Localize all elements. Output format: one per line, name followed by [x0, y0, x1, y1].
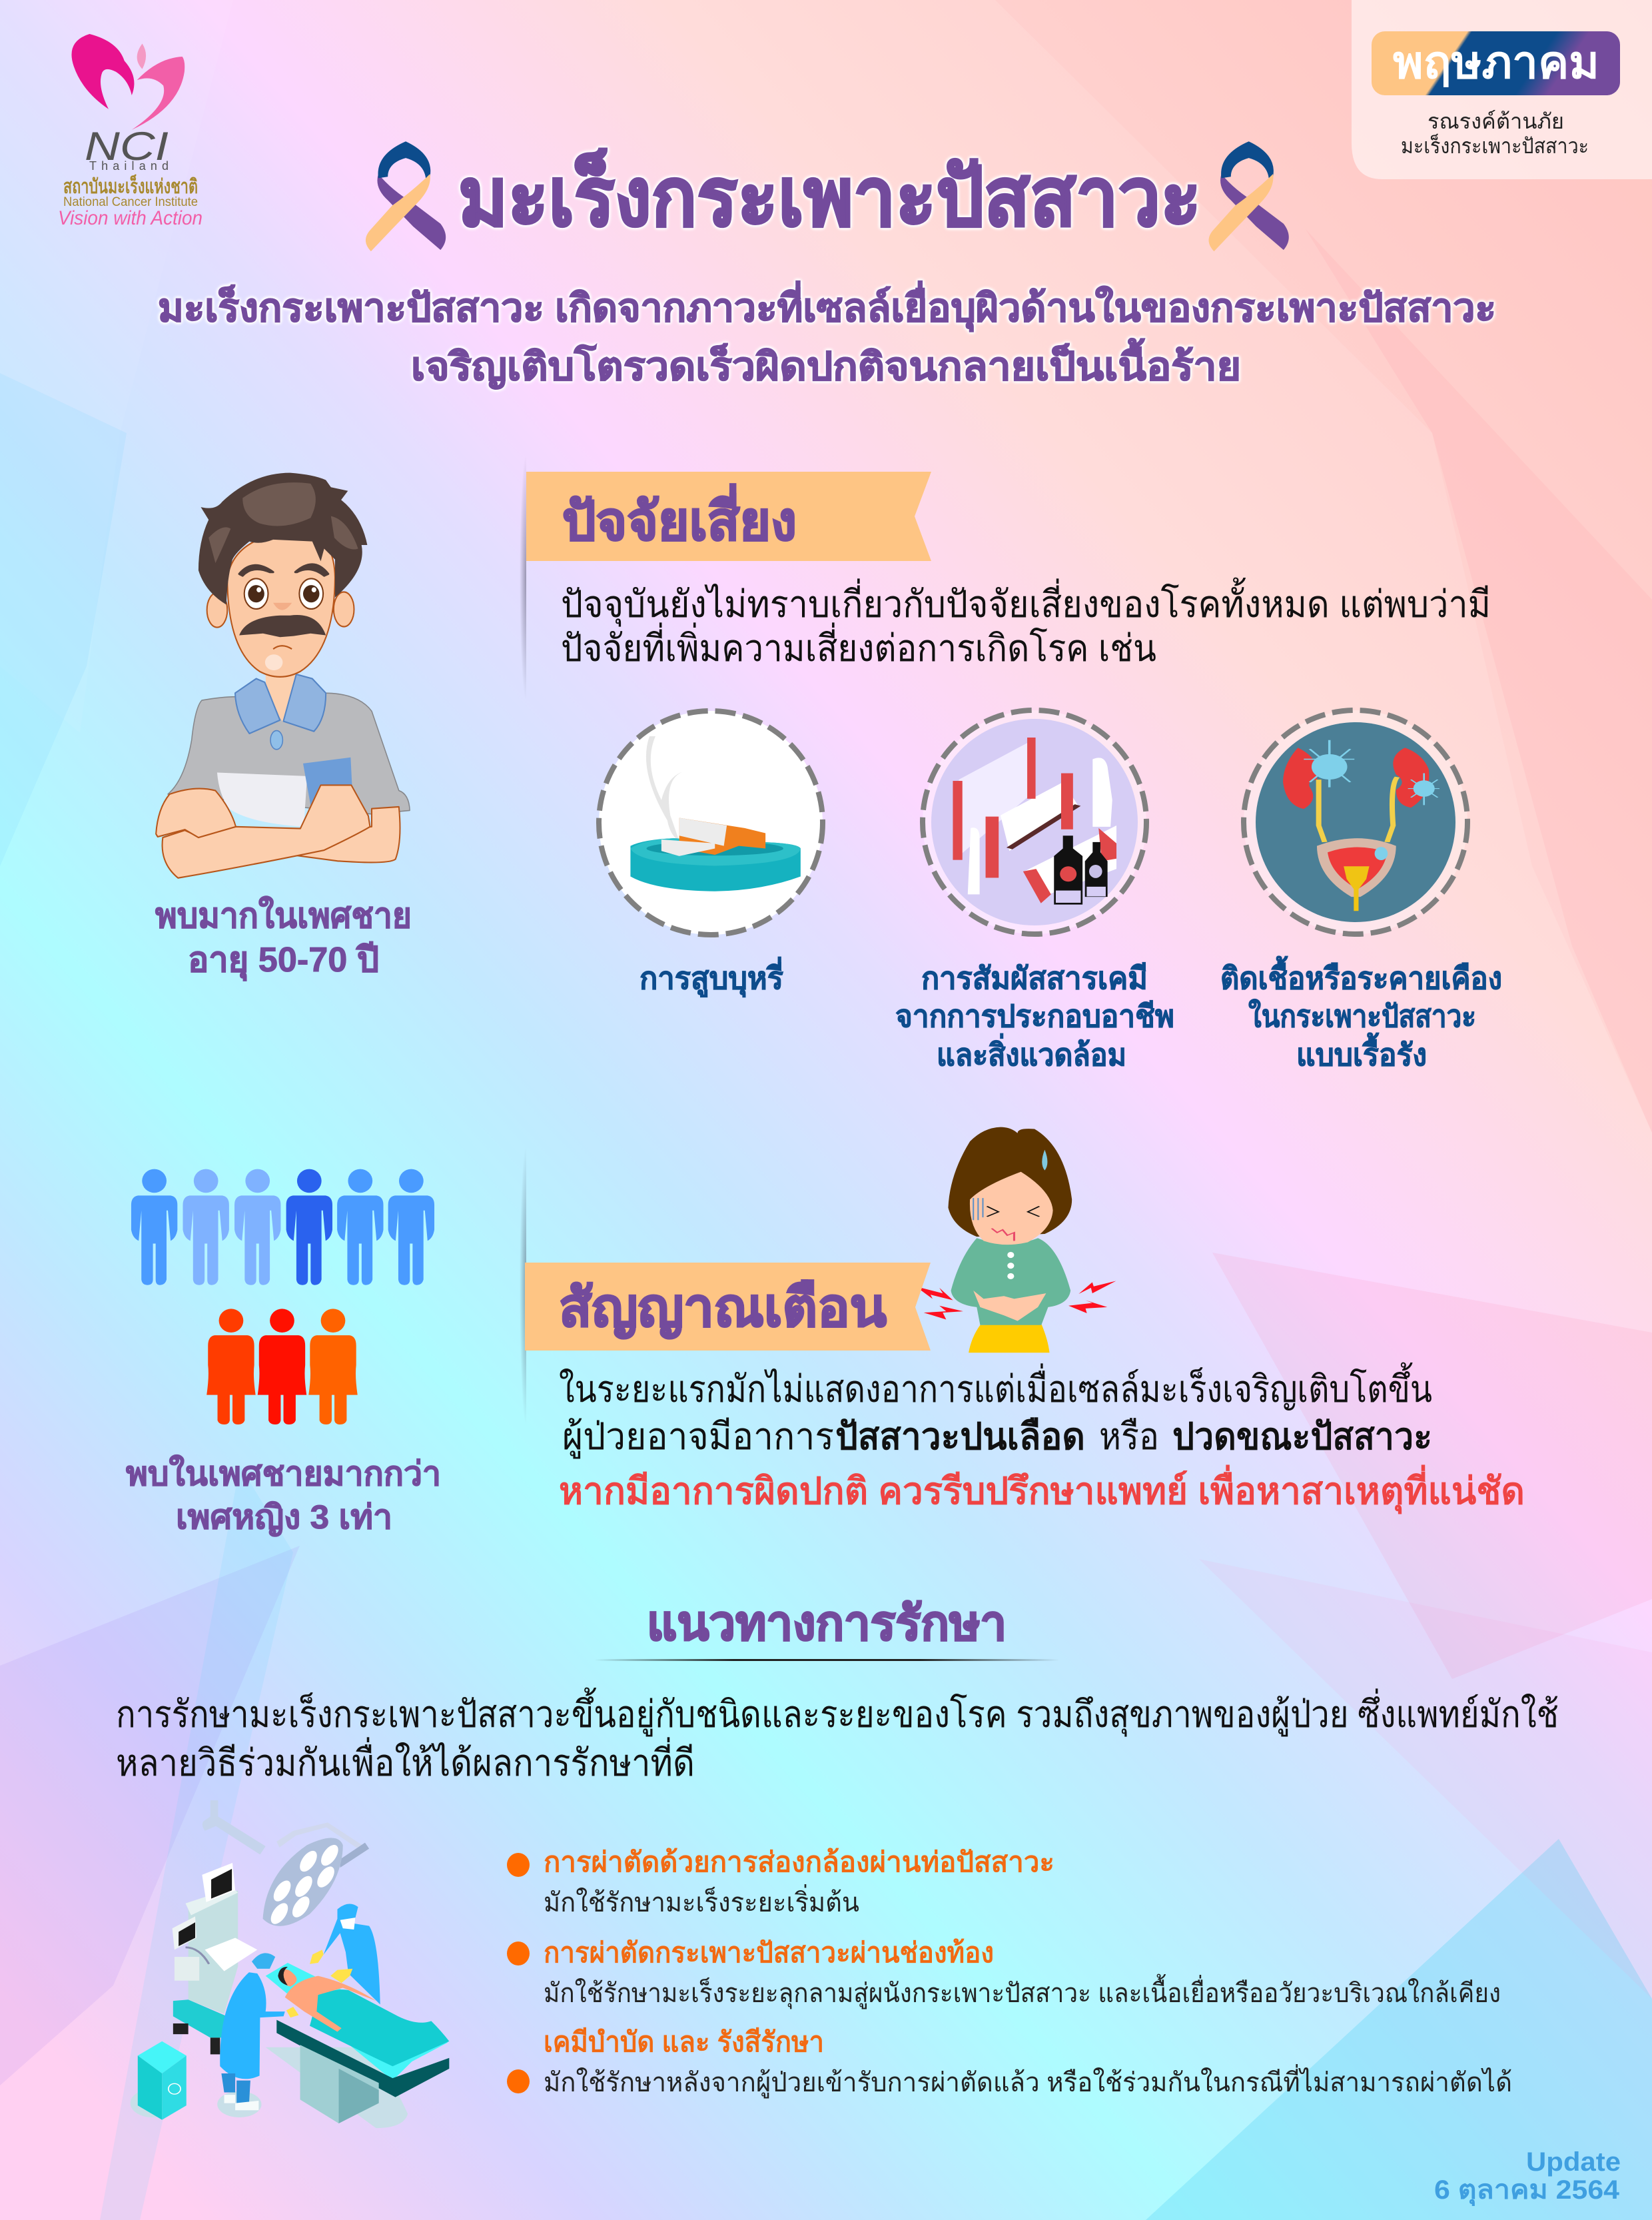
list: treatment options — [507, 1846, 1512, 2098]
text block: warning symptoms: หรือ — [1099, 1415, 1159, 1457]
heading: risk factors: ปัจจัยเสี่ยง — [562, 484, 797, 551]
label: infection — [1220, 955, 1502, 1072]
pictogram: three women — [206, 1309, 358, 1424]
risk section edge shadow — [513, 454, 526, 701]
illustration: operating room — [131, 1800, 449, 2128]
icon: left awareness ribbon — [366, 141, 446, 251]
update date — [1434, 2147, 1621, 2207]
treatment item: cystoscopic surgery: การผ่าตัดด้วยการส่องกล้องผ่านท่อปัสสาวะ — [544, 1846, 1054, 1878]
logo: National Cancer Institute: NCI — [85, 124, 169, 169]
intro text — [158, 280, 1496, 389]
treatment item: chemo and radiotherapy — [507, 2026, 1512, 2098]
label: infection: ในกระเพาะปัสสาวะ — [1248, 998, 1476, 1033]
caption: age range: พบมากในเพศชาย — [155, 895, 412, 935]
month label: พฤษภาคม — [1393, 37, 1599, 88]
caption: age range: อายุ 50-70 ปี — [188, 941, 379, 981]
label: infection: ติดเชื้อหรือระคายเคือง — [1220, 955, 1502, 995]
label: smoking: การสูบบุหรี่ — [639, 957, 783, 997]
treatment item: abdominal bladder surgery: การผ่าตัดกระเพาะปัสสาวะผ่านช่องท้อง — [544, 1937, 994, 1968]
heading: warning signs — [525, 1263, 931, 1351]
text block: risk intro: ปัจจัยที่เพิ่มความเสี่ยงต่อการเกิดโรค เช่น — [561, 622, 1156, 669]
treatment item: chemo and radiotherapy: มักใช้รักษาหลังจากผู้ป่วยเข้ารับการผ่าตัดแล้ว หรือใช้ร่วมกันในกรณีที่ไม่สามารถผ่าตัดได้ — [544, 2064, 1512, 2098]
icon: cigarette in ashtray — [599, 711, 823, 935]
text block: treatment intro: หลายวิธีร่วมกันเพื่อให้ได้ผลการรักษาที่ดี — [116, 1737, 695, 1784]
campaign caption — [1401, 109, 1589, 158]
panel: month badge — [1352, 0, 1652, 179]
label: infection: แบบเรื้อรัง — [1296, 1032, 1427, 1072]
caption: sex ratio: เพศหญิง 3 เท่า — [176, 1498, 392, 1536]
heading: risk factors — [526, 472, 931, 561]
campaign caption: มะเร็งกระเพาะปัสสาวะ — [1401, 133, 1589, 158]
treatment item: cystoscopic surgery — [507, 1846, 1054, 1918]
update date: 6 ตุลาคม 2564 — [1434, 2175, 1620, 2207]
logo: National Cancer Institute: National Cancer Institute — [63, 195, 198, 209]
text block: warning symptoms: ปัสสาวะปนเลือด — [835, 1415, 1085, 1457]
logo: National Cancer Institute: Thailand — [89, 159, 169, 173]
icon: chemical exposure at factory — [923, 710, 1146, 934]
heading: treatment: แนวทางการรักษา — [647, 1597, 1007, 1650]
text block: warning symptoms: หากมีอาการผิดปกติ ควรรีบปรึกษาแพทย์ เพื่อหาสาเหตุที่แน่ชัด — [559, 1464, 1525, 1514]
label: chemical exposure: จากการประกอบอาชีพ — [895, 999, 1174, 1033]
treatment item: abdominal bladder surgery — [507, 1937, 1501, 2009]
treatment item: cystoscopic surgery: มักใช้รักษามะเร็งระยะเริ่มต้น — [544, 1884, 859, 1918]
treatment item: abdominal bladder surgery: มักใช้รักษามะเร็งระยะลุกลามสู่ผนังกระเพาะปัสสาวะ และเนื้อเยื่อหรืออวัยวะบริเวณใกล้เคียง — [544, 1973, 1501, 2009]
month label — [1372, 31, 1620, 95]
caption: sex ratio: พบในเพศชายมากกว่า — [126, 1454, 441, 1492]
intro text: เจริญเติบโตรวดเร็วผิดปกติจนกลายเป็นเนื้อร้าย — [411, 338, 1241, 389]
text block: risk intro — [561, 578, 1491, 669]
icon: bladder infection — [1244, 710, 1467, 934]
label: chemical exposure: การสัมผัสสารเคมี — [921, 961, 1148, 995]
icon: right awareness ribbon — [1209, 141, 1289, 251]
intro text: มะเร็งกระเพาะปัสสาวะ เกิดจากภาวะที่เซลล์เยื่อบุผิวด้านในของกระเพาะปัสสาวะ — [158, 280, 1496, 332]
text block: warning symptoms: ผู้ป่วยอาจมีอาการ — [562, 1415, 834, 1459]
update date: Update — [1526, 2147, 1621, 2177]
illustration: woman with stomach ache — [915, 1127, 1116, 1353]
label: chemical exposure: และสิ่งแวดล้อม — [937, 1033, 1126, 1072]
text block: treatment intro — [116, 1688, 1559, 1784]
logo: National Cancer Institute: Vision with Action — [58, 207, 203, 229]
label: chemical exposure — [895, 961, 1174, 1072]
pictogram: six men — [131, 1169, 434, 1285]
campaign caption: รณรงค์ต้านภัย — [1428, 109, 1564, 133]
title: มะเร็งกระเพาะปัสสาวะ — [458, 149, 1201, 243]
illustration: older man with moustache — [156, 473, 410, 878]
treatment item: chemo and radiotherapy: เคมีบำบัด และ รังสีรักษา — [544, 2026, 824, 2057]
caption: age range — [155, 895, 412, 981]
text block: warning symptoms — [559, 1363, 1525, 1514]
caption: sex ratio — [126, 1454, 441, 1536]
text block: warning symptoms: ปวดขณะปัสสาวะ — [1172, 1415, 1432, 1457]
text block: warning symptoms: ในระยะแรกมักไม่แสดงอาการแต่เมื่อเซลล์มะเร็งเจริญเติบโตขึ้น — [559, 1363, 1432, 1410]
logo: National Cancer Institute — [58, 34, 203, 229]
warning section edge shadow — [513, 1146, 526, 1426]
heading: treatment — [594, 1597, 1059, 1661]
logo: National Cancer Institute: สถาบันมะเร็งแห่งชาติ — [63, 174, 198, 198]
text block: risk intro: ปัจจุบันยังไม่ทราบเกี่ยวกับปัจจัยเสี่ยงของโรคทั้งหมด แต่พบว่ามี — [561, 578, 1491, 627]
heading: warning signs: สัญญาณเตือน — [559, 1278, 887, 1339]
